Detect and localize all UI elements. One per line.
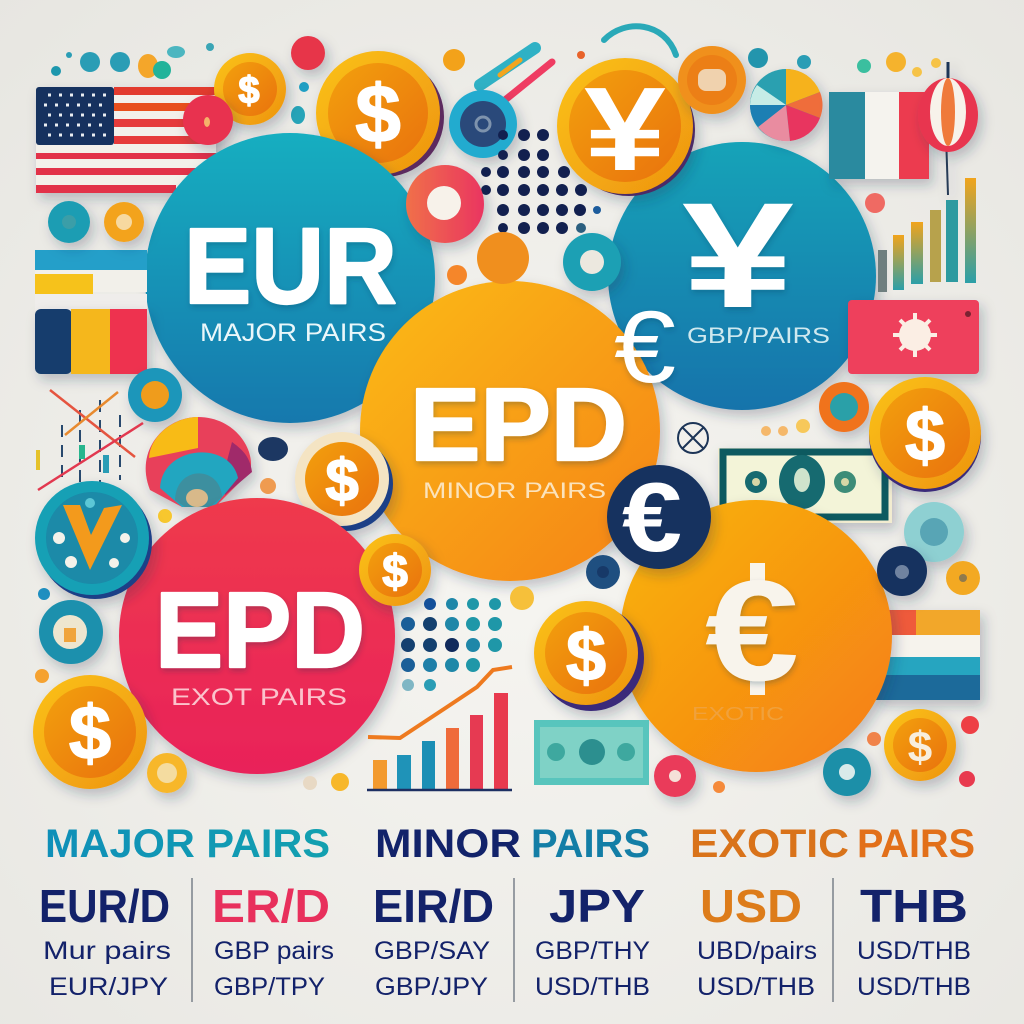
coin: large dollar bottom left: $ [69, 691, 111, 776]
column 3: minor: GBP/SAY [374, 937, 490, 965]
column 1: major pairs: EUR/JPY [49, 973, 168, 1001]
column 6: THB: USD/THB [857, 937, 971, 965]
coin: dollar lower right: $ [908, 723, 932, 772]
confetti top right [797, 52, 941, 213]
teal arc [604, 26, 676, 55]
pie chart [750, 69, 822, 141]
legend heading: minor pairs: MINOR [375, 822, 521, 866]
column 5: USD: USD [700, 880, 802, 932]
main circle: euro exotic: € [705, 552, 799, 711]
red button [183, 95, 233, 145]
flag: stripes right [875, 610, 980, 700]
orange coin blank [678, 46, 746, 114]
column 5: USD: UBD/pairs [697, 937, 817, 965]
blue ring button [449, 90, 517, 158]
column 5: USD [697, 880, 817, 1001]
candlestick bars [878, 178, 976, 292]
column 3: minor: EIR/D [373, 880, 494, 932]
column 1: major pairs: EUR/D [39, 880, 170, 932]
coin: dollar right [869, 377, 981, 492]
small coin [147, 753, 187, 793]
dark button [877, 546, 927, 596]
orange ring button [819, 382, 869, 432]
main circle: EPD minor pairs [360, 281, 660, 581]
column 4: JPY: GBP/THY [535, 937, 650, 965]
red orange target button [406, 165, 484, 243]
legend heading: minor pairs [375, 822, 650, 866]
small orange dot [447, 265, 467, 285]
dividers [192, 878, 833, 1002]
main circle: EPD exotic pairs: EXOT PAIRS [171, 684, 347, 711]
teal dot button [823, 748, 871, 796]
rising bar chart [367, 667, 512, 790]
main circle: EPD exotic pairs: EPD [155, 569, 365, 690]
red dot button [654, 755, 696, 797]
main circle: yen GBP pairs [608, 142, 876, 410]
column 4: JPY: USD/THB [535, 973, 650, 1001]
small orange coin [104, 202, 144, 242]
flag: red with white burst [848, 300, 979, 374]
column 5: USD: USD/THB [697, 973, 815, 1001]
legend heading: exotic pairs [690, 822, 975, 866]
coin: dollar right: $ [905, 396, 945, 476]
brush strokes [480, 48, 585, 100]
flag: tricolor left [35, 309, 147, 374]
column 3: minor [373, 880, 494, 1001]
flag: tricolor top right [829, 92, 929, 179]
small dots left [35, 478, 276, 683]
teal button with white dot [563, 233, 621, 291]
coin: large dollar: $ [355, 69, 401, 160]
main circle: euro exotic [620, 500, 892, 772]
coin: dollar lower right [884, 709, 956, 781]
coin: dollar mid [295, 432, 393, 531]
yellow dot [510, 586, 534, 610]
column 2: GBP: GBP pairs [214, 937, 334, 965]
dark dot small [586, 555, 620, 589]
flag: USA [36, 87, 216, 193]
column 6: THB [857, 880, 971, 1001]
dark euro coin: € [622, 462, 682, 572]
teal pale coin [904, 502, 964, 562]
main circle: EPD exotic pairs [119, 498, 395, 774]
teal dot [748, 48, 768, 68]
tiny dots bottom left [303, 773, 349, 791]
column 2: GBP [212, 880, 334, 1001]
legend heading: exotic pairs: PAIRS [857, 822, 975, 866]
coin: small dollar: $ [238, 70, 260, 112]
main circle: EPD minor pairs: MINOR PAIRS [423, 478, 606, 503]
flag: stripes left [35, 250, 147, 310]
column 4: JPY [535, 880, 650, 1001]
banknote [718, 448, 892, 523]
legend heading: major pairs: MAJOR PAIRS [45, 822, 330, 866]
legend heading: exotic pairs: EXOTIC [690, 822, 849, 866]
yellow splats [761, 419, 810, 436]
dome umbrella graphic [146, 417, 252, 507]
small teal coin [48, 201, 90, 243]
teal V coin [35, 481, 152, 599]
column 6: THB: THB [860, 880, 968, 932]
dot grid: bottom [401, 598, 502, 691]
red ball [291, 36, 325, 70]
cross circle [678, 423, 708, 453]
coin: dollar near red circle: $ [382, 545, 408, 597]
main circle: yen GBP pairs: GBP/PAIRS [687, 323, 830, 348]
main circle: euro exotic: EXOTIC [692, 704, 784, 724]
coin: dollar mid: $ [325, 447, 359, 514]
column 2: GBP: GBP/TPY [214, 973, 325, 1001]
main circle: EUR major pairs [145, 133, 435, 423]
splatter top left [51, 43, 309, 124]
teal lock button [39, 600, 103, 664]
column 2: GBP: ER/D [212, 880, 330, 932]
coin: dollar on orange circle [534, 601, 644, 711]
coin: dollar near red circle [359, 534, 431, 606]
column 1: major pairs: Mur pairs [43, 937, 171, 965]
column 3: minor: GBP/JPY [375, 973, 488, 1001]
orange ring small [946, 561, 980, 595]
small dots lower right [713, 716, 979, 793]
small orange dot [443, 49, 465, 71]
euro symbol on yen circle: € [614, 290, 676, 404]
dot grid: top [481, 129, 601, 234]
column 1: major pairs [39, 880, 171, 1001]
column 6: THB: USD/THB [857, 973, 971, 1001]
main circle: yen GBP pairs: ¥ [682, 171, 794, 339]
dark euro coin [607, 462, 711, 572]
coin: yen: ¥ [584, 63, 666, 196]
teal banknote [534, 720, 649, 785]
coin: dollar on orange circle: $ [566, 616, 606, 696]
main circle: EPD minor pairs: EPD [410, 367, 627, 482]
main circle: EUR major pairs: EUR [184, 205, 397, 326]
legend heading: minor pairs: PAIRS [531, 822, 650, 866]
coin: yen [557, 58, 695, 196]
balloon lantern [918, 62, 978, 195]
column 4: JPY: JPY [549, 880, 645, 932]
coin: large dollar [316, 51, 444, 177]
coin: small dollar [214, 53, 286, 125]
coin: large dollar bottom left [33, 675, 147, 789]
line chart [38, 390, 143, 490]
orange marble [477, 232, 529, 284]
dark dot [258, 437, 288, 461]
main circle: EUR major pairs: MAJOR PAIRS [200, 319, 386, 347]
blue orange button [128, 368, 182, 422]
